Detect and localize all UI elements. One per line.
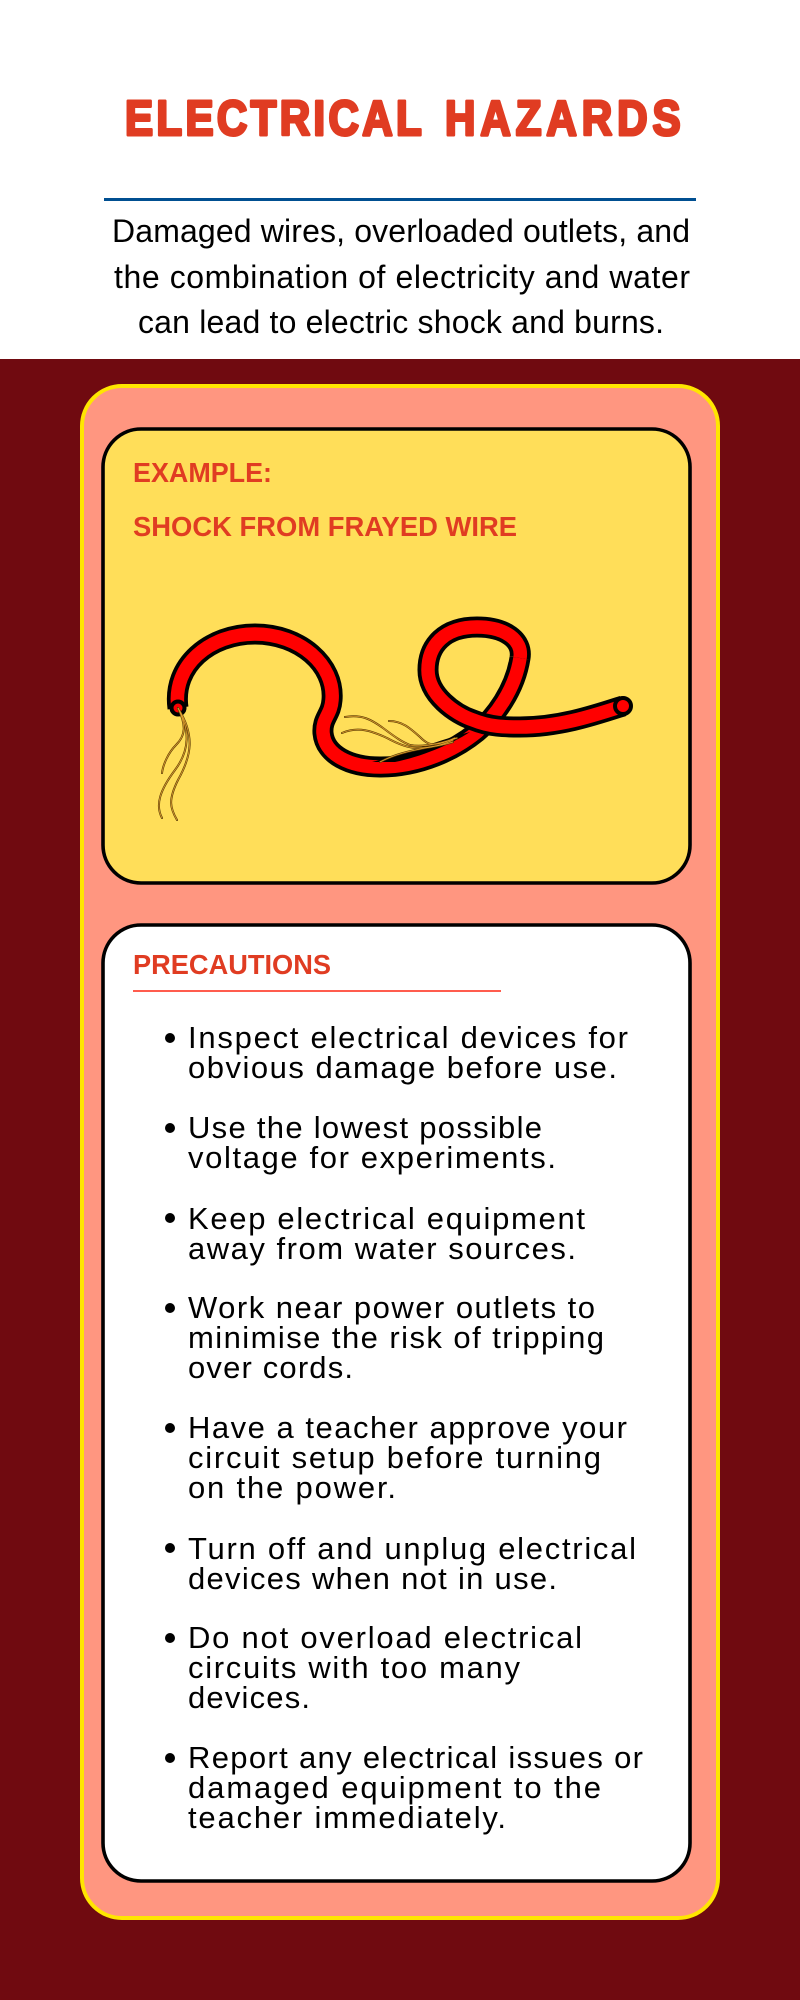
- list item: inspect: obvious damage before use.: [188, 1050, 617, 1085]
- icon: frayed red wire: [159, 627, 631, 820]
- example label: EXAMPLE:: [133, 457, 272, 488]
- list item: away from water: Keep electrical equipment: [188, 1201, 585, 1236]
- list item: lowest voltage: [165, 1110, 556, 1175]
- list item: report issues: Report any electrical issues or: [188, 1740, 643, 1775]
- list item: lowest voltage: voltage for experiments.: [188, 1140, 556, 1175]
- list item: near outlets: over cords.: [188, 1350, 353, 1385]
- list item: inspect: Inspect electrical devices for: [188, 1020, 628, 1055]
- list item: report issues: [165, 1740, 643, 1835]
- intro text: can lead to electric shock and burns.: [138, 304, 664, 340]
- precautions heading: PRECAUTIONS: [133, 949, 331, 980]
- list item: report issues: damaged equipment to the: [188, 1770, 601, 1805]
- list item: overload: devices.: [188, 1680, 310, 1715]
- title: [125, 91, 681, 146]
- list item: report issues: teacher immediately.: [188, 1800, 506, 1835]
- panel: example: [103, 429, 690, 883]
- heading underline: [133, 990, 501, 992]
- list item: unplug: [165, 1531, 636, 1596]
- list item: overload: Do not overload electrical: [188, 1620, 582, 1655]
- intro text: Damaged wires, overloaded outlets, and: [112, 213, 690, 249]
- list item: away from water: away from water sources.: [188, 1231, 576, 1266]
- list item: overload: [165, 1620, 582, 1715]
- list item: near outlets: Work near power outlets to: [188, 1290, 595, 1325]
- list item: teacher approval: [165, 1410, 627, 1505]
- intro text: [112, 213, 690, 340]
- list item: unplug: Turn off and unplug electrical: [188, 1531, 636, 1566]
- list item: teacher approval: Have a teacher approve your: [188, 1410, 627, 1445]
- panel: precautions: [103, 925, 690, 1881]
- list item: teacher approval: circuit setup before turning: [188, 1440, 601, 1475]
- panel: salmon container: [82, 386, 718, 1918]
- title: ELECTRICAL: [125, 91, 422, 146]
- list item: near outlets: minimise the risk of tripping: [188, 1320, 604, 1355]
- list item: lowest voltage: Use the lowest possible: [188, 1110, 542, 1145]
- intro text: the combination of electricity and water: [114, 259, 690, 295]
- list item: away from water: [165, 1201, 585, 1266]
- list item: inspect: [165, 1020, 628, 1085]
- title rule: [104, 198, 696, 201]
- title: HAZARDS: [445, 91, 681, 146]
- list item: teacher approval: on the power.: [188, 1470, 396, 1505]
- list item: overload: circuits with too many: [188, 1650, 520, 1685]
- list item: near outlets: [165, 1290, 604, 1385]
- list item: unplug: devices when not in use.: [188, 1561, 557, 1596]
- example heading: SHOCK FROM FRAYED WIRE: [133, 511, 517, 542]
